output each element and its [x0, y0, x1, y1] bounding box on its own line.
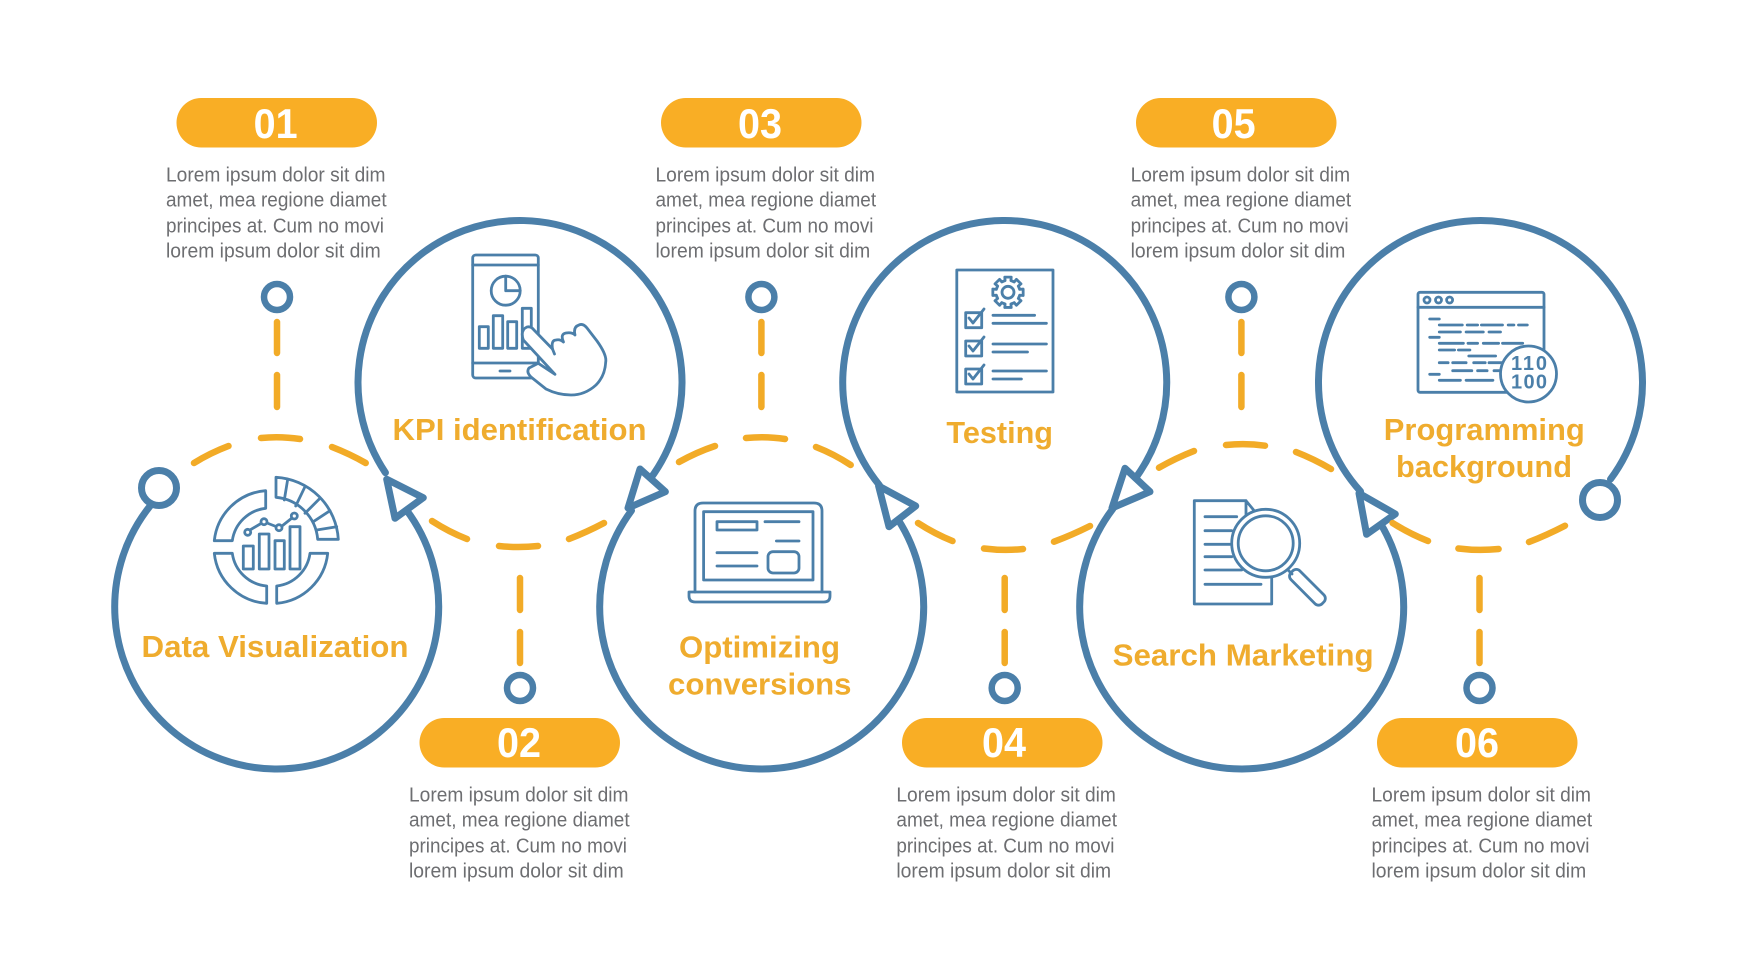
text block: step 5 description: [1131, 164, 1352, 262]
dashed arc: step 4 bottom: [918, 523, 1090, 550]
text block: step 1 description: principes at. Cum no movi: [166, 216, 384, 238]
arrow: step 4 to step 5: [1112, 468, 1150, 508]
text block: step 3 description: Lorem ipsum dolor sit dim: [656, 164, 875, 186]
connector: step 1 dashed leader: [274, 322, 280, 407]
label: Optimizing conversions: conversions: [668, 666, 852, 702]
label: Programming background: Programming: [1384, 412, 1585, 447]
connector: step 2 dot: [507, 675, 533, 701]
icon: code window with binary badge: [1418, 292, 1556, 402]
panel: step 01 Data Visualization: [115, 98, 439, 769]
number badge 05: [1136, 98, 1336, 148]
connector: step 3 dot: [748, 284, 774, 310]
connector: step 6 dot: [1466, 675, 1492, 701]
number badge 02: [420, 718, 620, 768]
text block: step 2 description: lorem ipsum dolor sit dim: [409, 860, 624, 882]
arrow: step 2 to step 3: [628, 469, 665, 508]
text block: step 5 description: lorem ipsum dolor sit dim: [1131, 240, 1345, 262]
panel: step 06 Programming background: [1318, 221, 1642, 882]
label: Optimizing conversions: [668, 630, 852, 702]
text block: step 1 description: lorem ipsum dolor sit dim: [166, 240, 381, 262]
label: Data Visualization: Data Visualization: [142, 629, 408, 664]
connector: step 3 dashed leader: [758, 322, 765, 407]
text block: step 4 description: Lorem ipsum dolor sit dim: [896, 784, 1116, 806]
dashed arc: step 6 bottom: [1393, 523, 1565, 550]
number badge 03: [661, 98, 862, 148]
panel: step 02 KPI identification: [358, 221, 682, 882]
arrow: step 3 to step 4: [879, 486, 916, 527]
connector: step 2 dashed leader: [517, 578, 523, 663]
number badge 03: 03: [738, 100, 782, 147]
text block: step 6 description: Lorem ipsum dolor sit dim: [1372, 784, 1591, 806]
dashed arc: step 2 bottom: [432, 521, 604, 547]
number badge 04: [902, 718, 1102, 768]
label: Programming background: [1384, 412, 1585, 484]
number badge 04: 04: [982, 719, 1027, 766]
text block: step 4 description: lorem ipsum dolor sit dim: [896, 860, 1111, 882]
connector: step 6 dashed leader: [1476, 578, 1483, 663]
dashed arc: step 1 top: [194, 437, 366, 463]
dashed arc: step 5 top: [1159, 444, 1331, 469]
text block: step 3 description: amet, mea regione diamet: [656, 190, 877, 212]
text block: step 2 description: Lorem ipsum dolor sit dim: [409, 784, 628, 806]
arrow: step 5 to step 6: [1359, 493, 1395, 534]
connector: step 4 dot: [992, 675, 1018, 701]
text block: step 3 description: [656, 164, 877, 262]
text block: step 5 description: amet, mea regione diamet: [1131, 190, 1352, 212]
ring: step 4 circle: [843, 221, 1167, 485]
label: Programming background: background: [1396, 449, 1572, 484]
text block: step 6 description: lorem ipsum dolor sit dim: [1372, 860, 1586, 882]
text block: step 4 description: principes at. Cum no movi: [896, 836, 1114, 858]
text block: step 6 description: principes at. Cum no movi: [1372, 836, 1590, 858]
connector: step 5 dashed leader: [1238, 322, 1245, 407]
icon: checklist document with gear: [957, 270, 1053, 392]
connector: step 1 dot: [264, 284, 290, 310]
icon: code window with binary badge: 110: [1511, 353, 1547, 375]
arrow: step 1 to step 2: [387, 479, 423, 518]
icon: code window with binary badge: 100: [1511, 372, 1547, 394]
panel: step 04 Testing: [843, 221, 1167, 883]
text block: step 4 description: amet, mea regione diamet: [896, 810, 1117, 832]
number badge 01: 01: [254, 100, 298, 147]
connector: step 6 end dot: [1582, 482, 1618, 518]
text block: step 4 description: [896, 784, 1117, 882]
text block: step 3 description: lorem ipsum dolor sit dim: [656, 240, 870, 262]
icon: document with magnifying glass: [1194, 501, 1327, 607]
label: KPI identification: KPI identification: [392, 412, 646, 447]
ring: step 3 circle: [600, 511, 924, 769]
connector: step 1 start dot: [142, 470, 176, 506]
dashed arc: step 3 top: [679, 437, 851, 465]
text block: step 3 description: principes at. Cum no movi: [656, 216, 874, 238]
number badge 01: [176, 98, 377, 148]
panel: step 05 Search Marketing: [1080, 98, 1404, 769]
label: Optimizing conversions: Optimizing: [679, 630, 840, 664]
number badge 06: [1377, 718, 1578, 768]
text block: step 6 description: [1372, 784, 1593, 882]
text block: step 5 description: Lorem ipsum dolor sit dim: [1131, 164, 1350, 186]
ring: step 2 circle: [358, 221, 682, 479]
icon: laptop with interface: [689, 503, 830, 602]
ring: step 5 circle: [1080, 509, 1404, 769]
ring: step 1 circle: [115, 506, 439, 769]
ring: step 6 circle: [1318, 221, 1642, 492]
panel: step 03 Optimizing conversions: [600, 98, 924, 769]
connector: step 4 dashed leader: [1001, 578, 1008, 663]
number badge 02: 02: [497, 719, 541, 766]
text block: step 5 description: principes at. Cum no movi: [1131, 216, 1349, 238]
text block: step 2 description: [409, 784, 630, 882]
label: Search Marketing: Search Marketing: [1113, 638, 1374, 672]
label: Testing: Testing: [946, 415, 1053, 450]
connector: step 5 dot: [1228, 284, 1254, 310]
text block: step 6 description: amet, mea regione diamet: [1372, 810, 1593, 832]
number badge 05: 05: [1212, 100, 1256, 147]
icon: smartphone with chart and pointing hand: [473, 255, 606, 395]
number badge 06: 06: [1455, 719, 1499, 766]
text block: step 1 description: amet, mea regione diamet: [166, 190, 387, 212]
text block: step 1 description: [166, 164, 387, 262]
text block: step 2 description: principes at. Cum no movi: [409, 836, 627, 858]
icon: data visualization dial chart: [214, 477, 338, 603]
text block: step 1 description: Lorem ipsum dolor sit dim: [166, 164, 386, 186]
text block: step 2 description: amet, mea regione diamet: [409, 810, 630, 832]
